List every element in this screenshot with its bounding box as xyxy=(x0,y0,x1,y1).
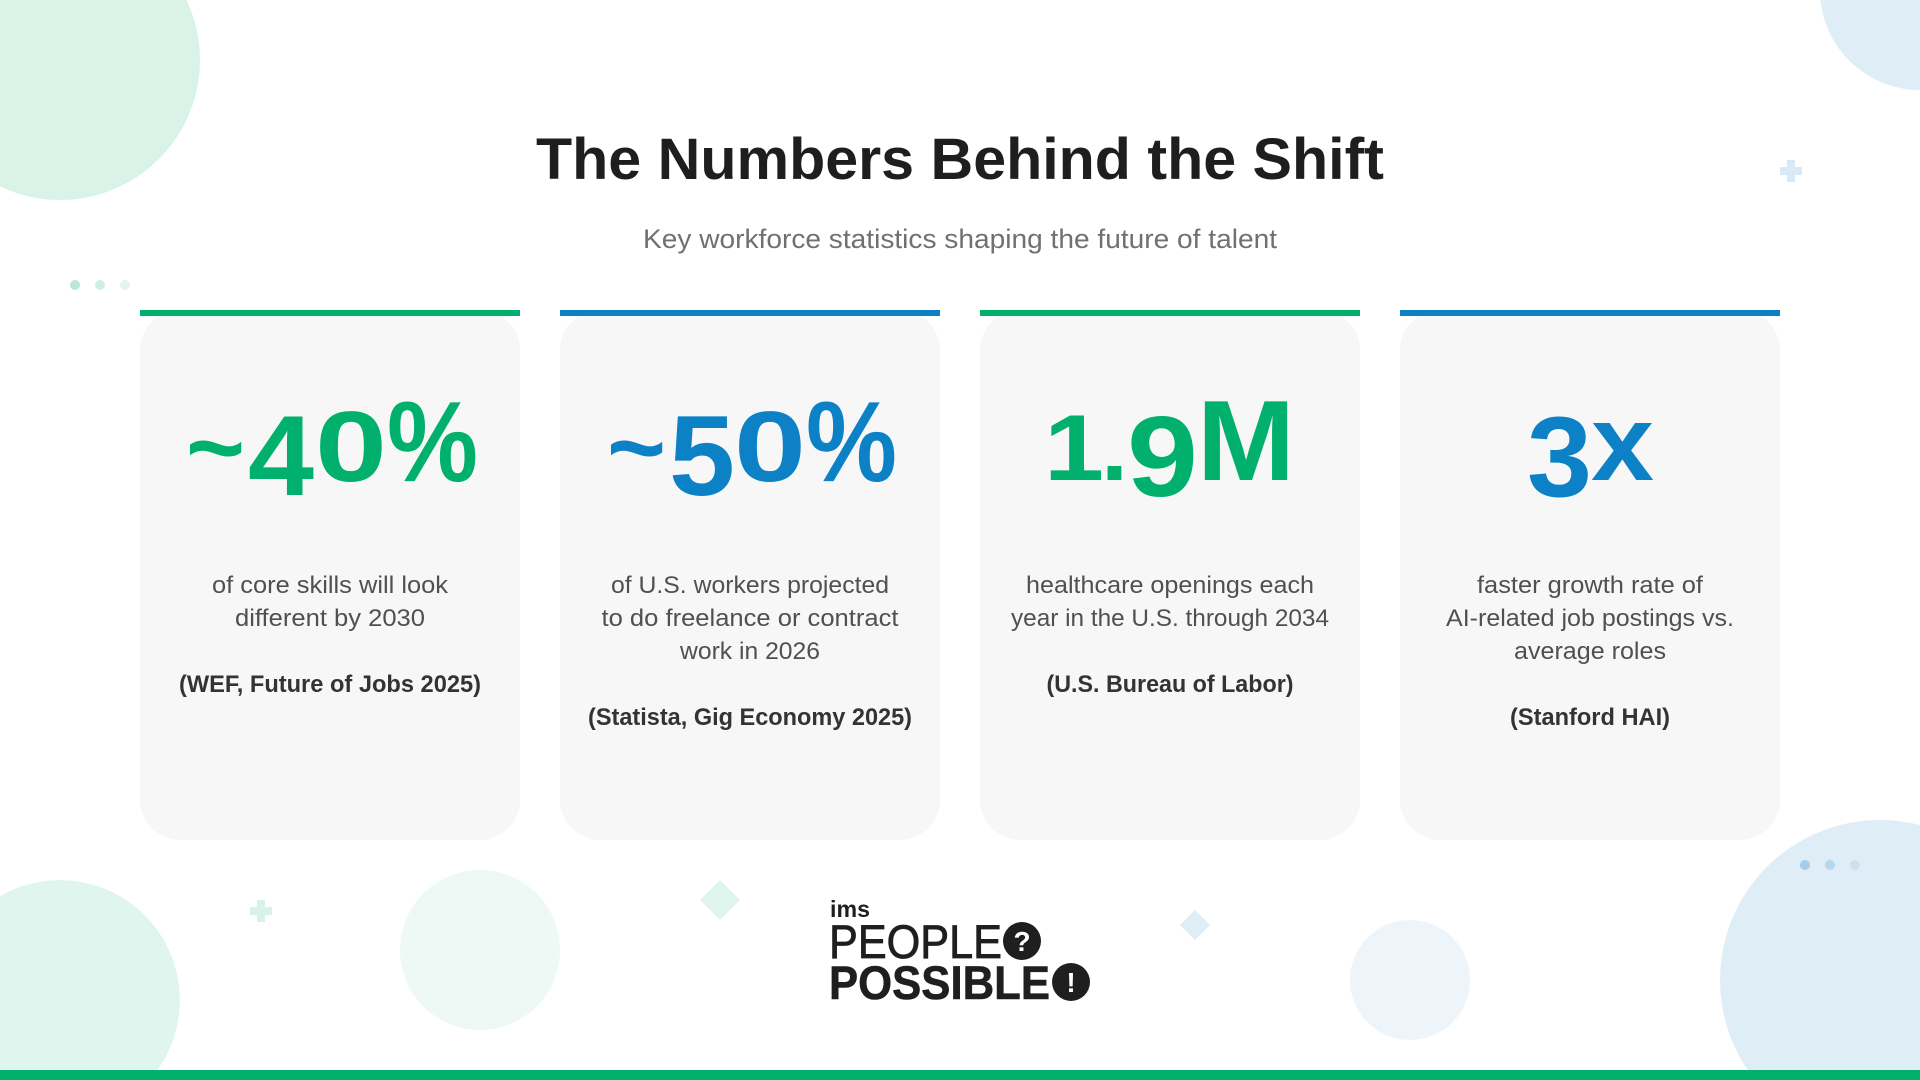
logo: ims People Possible: POSSIBLE xyxy=(829,956,1050,1009)
statistic: ~50%: 5 xyxy=(669,393,735,520)
panel: card 4 AI job postings xyxy=(1400,310,1780,840)
statistic: ~50%: 0 xyxy=(734,391,806,503)
panel: card 1 core skills xyxy=(140,310,520,840)
statistic: ~40%: % xyxy=(387,379,478,506)
panel: card 2 freelance xyxy=(560,310,940,840)
description: work in 2026 xyxy=(679,638,820,665)
statistic: 3x: x xyxy=(1591,382,1654,503)
logo: ims People Possible: ims xyxy=(830,896,870,922)
source: (Stanford HAI) xyxy=(1510,704,1670,731)
subtitle: Key workforce statistics shaping the future of talent xyxy=(643,224,1278,254)
statistic: 1.9M: 9 xyxy=(1127,394,1198,521)
bottom bar xyxy=(0,1070,1920,1080)
description: faster growth rate of xyxy=(1477,572,1703,599)
description: different by 2030 xyxy=(235,605,425,632)
statistic: 3x: 3 xyxy=(1527,394,1592,521)
logo: ims People Possible xyxy=(829,896,1090,1009)
statistic: 1.9M: M xyxy=(1197,378,1295,505)
description: AI-related job postings vs. xyxy=(1446,605,1734,632)
statistic: ~40%: 4 xyxy=(248,393,314,520)
statistic: 1.9M: 1 xyxy=(1044,395,1104,500)
statistic: ~50%: ~ xyxy=(607,392,666,504)
description: to do freelance or contract xyxy=(602,605,899,632)
logo: ims People Possible: PEOPLE xyxy=(829,915,1002,968)
statistic: ~40%: ~ xyxy=(186,392,245,504)
description: healthcare openings each xyxy=(1026,572,1314,599)
statistic: 1.9M: . xyxy=(1101,395,1128,500)
description: year in the U.S. through 2034 xyxy=(1011,605,1329,632)
source: (U.S. Bureau of Labor) xyxy=(1046,671,1294,698)
source: (WEF, Future of Jobs 2025) xyxy=(179,671,481,698)
title: The Numbers Behind the Shift xyxy=(536,127,1384,192)
panel: card 3 healthcare xyxy=(980,310,1360,840)
description: of U.S. workers projected xyxy=(611,572,889,599)
statistic: ~40%: 0 xyxy=(315,391,387,503)
source: (Statista, Gig Economy 2025) xyxy=(588,704,912,731)
logo: ims People Possible: ! xyxy=(1066,967,1076,998)
description: of core skills will look xyxy=(212,572,449,599)
logo: ims People Possible: ? xyxy=(1013,926,1031,957)
statistic: ~50%: % xyxy=(806,379,897,506)
description: average roles xyxy=(1514,638,1666,665)
